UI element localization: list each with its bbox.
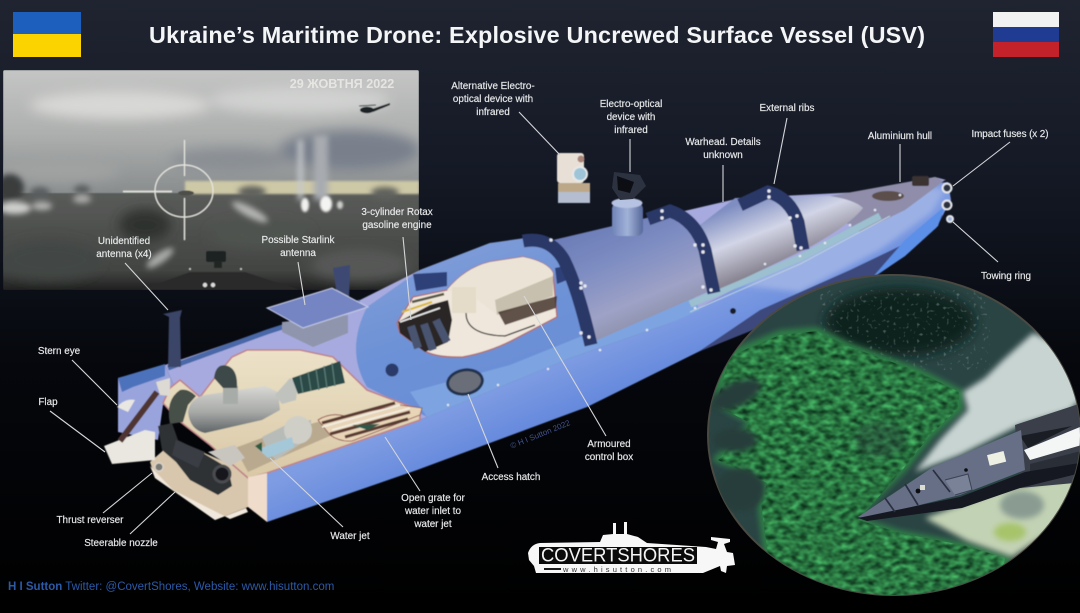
- access panel cut: [248, 473, 267, 522]
- label: electro-optical device: [600, 99, 662, 172]
- label: open grate: [385, 437, 466, 530]
- dark patches: [705, 372, 906, 512]
- turret: [612, 198, 643, 236]
- hull side: [267, 182, 951, 522]
- label: towing ring: Towing ring: [981, 271, 1031, 282]
- rib bolts: [549, 189, 803, 339]
- flap actuator: [120, 392, 157, 441]
- panel: video still of attack: [0, 70, 420, 290]
- label: flap: Flap: [38, 397, 58, 408]
- control box: [447, 257, 557, 336]
- label: warhead: unknown: [703, 150, 743, 161]
- label: armoured control box: control box: [585, 452, 633, 463]
- deck: [165, 177, 946, 478]
- label: open grate: water jet: [413, 519, 452, 530]
- label: towing ring: [953, 222, 1031, 282]
- steerable nozzle and thrust reverser: [158, 423, 245, 495]
- deck hatch on bow: [872, 191, 904, 201]
- electro-optical device on turret: [612, 172, 646, 200]
- label: rotax engine: gasoline engine: [362, 220, 432, 231]
- hatch: [444, 365, 486, 399]
- label: flap: [38, 397, 105, 452]
- rib 1: [523, 240, 591, 345]
- label: starlink antenna: [262, 235, 335, 305]
- alternative electro-optical device: [557, 153, 590, 203]
- label: access hatch: [468, 394, 540, 483]
- label: water jet: Water jet: [330, 531, 370, 542]
- label: thrust reverser: [57, 473, 152, 526]
- label: steerable nozzle: [84, 492, 175, 549]
- flag: Ukraine: [13, 12, 81, 57]
- horizon glow band: [185, 181, 419, 194]
- flap: [104, 430, 155, 464]
- label: steerable nozzle: Steerable nozzle: [84, 538, 158, 549]
- small hole: [730, 308, 736, 314]
- label: aluminium hull: [868, 131, 932, 182]
- stern deck side wall: [118, 365, 180, 440]
- fuses and towing ring: [942, 184, 953, 222]
- usv deck details: [885, 470, 950, 512]
- exhaust muffler: [169, 365, 298, 433]
- label: electro-optical device: Electro-optical: [600, 99, 662, 110]
- date stamp: 29 ЖОВТНЯ 2022: [290, 77, 394, 91]
- label: unidentified antenna: Unidentified: [98, 236, 150, 247]
- footer credit: H I Sutton Twitter: @CovertShores, Website: www.hisutton.com: [8, 581, 334, 593]
- dark water speckles: [820, 290, 990, 370]
- label: open grate: water inlet to: [404, 506, 461, 517]
- warhead section: [700, 196, 863, 292]
- label: electro-optical device: device with: [607, 112, 655, 123]
- label: stern eye: [38, 346, 117, 405]
- reticle: [123, 140, 213, 240]
- label: open grate: Open grate for: [401, 493, 466, 504]
- label: armoured control box: [524, 296, 633, 463]
- copyright on hull: © H I Sutton 2022: [509, 418, 572, 451]
- splashes: [301, 196, 343, 212]
- bow deck: [830, 177, 944, 232]
- steer ring: [155, 463, 163, 471]
- rib 2: [648, 211, 714, 293]
- label: alternative electro-optical device: Alternative Electro-: [451, 81, 535, 92]
- label: unidentified antenna: antenna (x4): [96, 249, 152, 260]
- flag: Russia: [993, 12, 1059, 57]
- label: unidentified antenna: [96, 236, 168, 310]
- usv stern wake: [1015, 402, 1080, 488]
- label: external ribs: External ribs: [760, 103, 814, 114]
- usv hull: [858, 430, 1025, 518]
- water jet tunnel: [235, 416, 348, 472]
- bright bow flare: [872, 206, 945, 278]
- label: impact fuses: [953, 129, 1048, 186]
- label: armoured control box: Armoured: [587, 439, 631, 450]
- label: rotax engine: 3-cylinder Rotax: [361, 207, 433, 218]
- logo: Covert Shores submarine: [528, 522, 735, 574]
- stern eye fitting: [117, 400, 135, 412]
- open grate: [318, 403, 422, 441]
- lower bow shadow band: [698, 214, 944, 352]
- label: rotax engine: [361, 207, 433, 320]
- section between ribs: [553, 212, 712, 342]
- label: starlink antenna: antenna: [280, 248, 316, 259]
- corrugated hose: [292, 361, 345, 394]
- bow fitting: [912, 176, 929, 186]
- green wake: [710, 327, 1012, 600]
- label: external ribs: [760, 103, 814, 184]
- label: stern eye: Stern eye: [38, 346, 81, 357]
- label: aluminium hull: Aluminium hull: [868, 131, 932, 142]
- helicopter: [359, 103, 390, 113]
- engine bay cutout: [397, 257, 557, 357]
- label: alternative electro-optical device: [451, 81, 560, 155]
- label: thrust reverser: Thrust reverser: [57, 515, 124, 526]
- port: [386, 364, 398, 376]
- label: impact fuses: Impact fuses (x 2): [972, 129, 1048, 140]
- label: alternative electro-optical device: infrared: [476, 107, 510, 118]
- USV bow in foreground: [171, 272, 266, 280]
- logo: Covert Shores submarine: www.hisutton.com: [562, 565, 671, 574]
- stern machinery bay cutout: [163, 350, 420, 478]
- title: Ukraine’s Maritime Drone: Explosive Uncrewed Surface Vessel (USV): [149, 22, 925, 48]
- far deck edge strip: [168, 302, 360, 368]
- antenna: [163, 310, 182, 367]
- inset: aerial view of USV in wake: [705, 275, 1080, 600]
- stern lower block: [150, 440, 250, 520]
- label: warhead: [685, 137, 761, 202]
- label: warhead: Warhead. Details: [685, 137, 761, 148]
- label: water jet: [270, 458, 370, 542]
- engine cylinders: [398, 294, 452, 352]
- logo: Covert Shores submarine: COVERTSHORES: [541, 546, 695, 566]
- hull rivets: [447, 194, 901, 406]
- starlink antenna: [267, 265, 368, 347]
- light bow side: [740, 186, 945, 292]
- rib 3: [740, 192, 803, 250]
- forward blue section around engine bay: [356, 238, 593, 417]
- white foam: [915, 333, 1080, 472]
- panel: hull cutaway illustration: [104, 176, 953, 522]
- light strip along deck edge: [410, 290, 700, 417]
- label: access hatch: Access hatch: [482, 472, 540, 483]
- usv shadow: [858, 462, 1080, 521]
- dark blue cut edges: [413, 272, 447, 291]
- label: alternative electro-optical device: optical device with: [453, 94, 533, 105]
- label: electro-optical device: infrared: [614, 125, 648, 136]
- label: starlink antenna: Possible Starlink: [262, 235, 335, 246]
